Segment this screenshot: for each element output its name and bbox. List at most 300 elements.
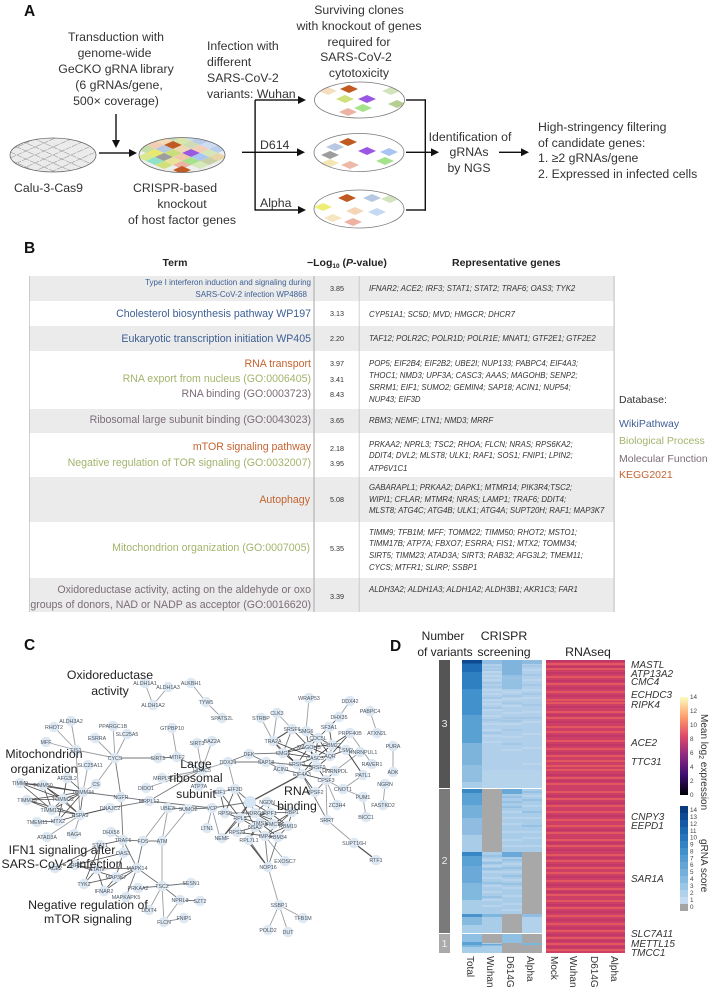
network node labels: NGRN	[377, 782, 393, 788]
axis labels: CRISPR columns: D614G	[504, 956, 515, 988]
colorbar: gRNA score: 0	[690, 904, 694, 911]
icon: surviving dish Wuhan	[314, 82, 406, 118]
gene labels: SAR1A	[631, 874, 664, 885]
network node labels: VCP	[207, 806, 218, 812]
text: transduction: genome-wide	[78, 46, 152, 60]
colorbar: mean log2 expression: 2	[690, 778, 694, 785]
table header: (	[340, 257, 347, 269]
network node labels: PRKAA2	[128, 886, 149, 892]
colorbar: gRNA score: 2	[690, 890, 694, 897]
gene labels: SLC7A11	[631, 929, 673, 940]
network node labels: UBE2I	[160, 806, 176, 812]
label: mitochondrion organization: organization	[10, 762, 78, 776]
network node labels: CS	[92, 782, 100, 788]
row: mitochondrion: CYCS; MTFR1; SLIRP; SSBP1	[369, 563, 477, 572]
row: oxidoreductase: groups of donors, NAD or NADP as acceptor (GO:0016620)	[30, 599, 311, 611]
network node labels	[12, 681, 401, 936]
network node labels: ALDH1A2	[141, 703, 165, 709]
network node labels: RPS6	[218, 811, 232, 817]
text: high-stringency filtering: 1. ≥2 gRNAs/gene	[538, 151, 639, 165]
network node labels: TMS1	[253, 821, 267, 827]
legend: database: Biological Process	[619, 435, 705, 447]
text: infection: Infection with	[207, 39, 279, 53]
arrows: infection branches	[242, 96, 306, 214]
network node labels: LTN1	[201, 826, 213, 832]
text: infection: SARS-CoV-2	[207, 71, 279, 85]
network node labels: DHX58	[102, 830, 120, 836]
row: ribosomal: 3.65	[330, 416, 344, 425]
network node labels: SLC25A11	[77, 763, 103, 769]
text: transduction: GeCKO gRNA library	[58, 62, 175, 76]
row: oxidoreductase: ALDH3A2; ALDH1A3; ALDH1A2; ALDH3B1; AKR1C3; FAR1	[368, 585, 578, 594]
network node labels: EIF3D	[227, 787, 243, 793]
panel A: screening workflow	[0, 3, 697, 228]
row: autophagy: GABARAPL1; PRKAA2; DAPK1; MTMR14; PIK3R4;TSC2;	[369, 483, 572, 492]
row: cholesterol	[116, 308, 516, 320]
colorbar: gRNA score: 10	[690, 834, 698, 842]
label: large ribosomal subunit: Large	[180, 757, 212, 771]
table bands	[29, 276, 614, 612]
colorbar: gRNA score: 11	[690, 828, 697, 835]
network node labels: AFG3L2	[57, 776, 77, 782]
row: mTOR: 3.95	[330, 459, 344, 468]
network node labels: SPATS2L	[211, 716, 233, 722]
row: type I interferon	[145, 278, 576, 299]
text: transduction: Transduction with	[68, 30, 164, 44]
row: ribosomal	[90, 414, 494, 426]
legend: database: Database:	[619, 394, 667, 406]
network node labels: SSBP1	[270, 903, 288, 909]
network node labels: CNOT1	[334, 787, 352, 793]
row: mTOR: mTOR signaling pathway	[193, 441, 312, 453]
network node labels: DDIT4	[141, 908, 157, 914]
row: mitochondrion: TIMM9; TFB1M; MFF; TOMM22; TIMM50; RHOT2; MSTO1;	[369, 528, 577, 537]
network node labels: TFB1M	[294, 916, 312, 922]
label: mitochondrion organization: Mitochondrion	[5, 747, 83, 761]
network node labels: CASC3	[306, 756, 324, 762]
colorbar: mean log2 expression	[680, 694, 709, 810]
label: oxidoreductase activity: Oxidoreductase	[67, 668, 153, 682]
network node labels: SF3A1	[321, 725, 337, 731]
text: variant Alpha: Alpha	[260, 196, 292, 210]
network node labels: TIMM23	[17, 798, 37, 804]
network node labels: TRAF6	[115, 838, 131, 844]
colorbar: gRNA score	[680, 806, 709, 911]
network node labels: NSA2	[248, 825, 262, 831]
network node labels: DDX42	[341, 699, 359, 705]
row: mitochondrion: SIRT5; TIMM23; ATAD3A; SIRT3; RAB32; AFG3L2; TMEM11;	[369, 551, 583, 560]
table column rules	[29, 276, 615, 612]
network node labels: RAVER1	[362, 762, 382, 768]
text: identification: Identification of	[429, 130, 512, 144]
arrows: bracket to NGS	[406, 99, 439, 211]
gene labels: EEPD1	[631, 821, 664, 832]
network node labels: SLC25A5	[116, 732, 138, 738]
colorbar: gRNA score: gRNA score	[698, 839, 709, 893]
column header: number of variants	[417, 629, 473, 659]
colorbar: mean log2 expression: Mean log	[698, 714, 709, 755]
colorbar: gRNA score: 12	[690, 821, 698, 828]
panel letter C: C	[24, 637, 35, 654]
text: identification: by NGS	[447, 161, 491, 175]
row: mTOR: Negative regulation of TOR signaling (GO:0032007)	[68, 457, 311, 469]
network node labels: SESN1	[182, 881, 200, 887]
gene labels: METTL15	[631, 939, 675, 950]
label: RNA binding: RNA	[284, 784, 311, 798]
network node labels: RHOT2	[45, 725, 63, 731]
axis labels: RNAseq columns: Wuhan	[567, 956, 578, 988]
text: high-stringency filtering: 2. Expressed in infected cells	[538, 167, 697, 181]
table header: Term	[163, 257, 187, 269]
colorbar: mean log2 expression: 2	[697, 755, 704, 759]
text: transduction: (6 gRNAs/gene,	[75, 78, 163, 92]
text: identification	[429, 130, 512, 175]
colorbar: gRNA score: 9	[690, 842, 694, 848]
network node labels: ATM	[157, 839, 167, 845]
network node labels: HDAC5	[193, 768, 211, 774]
gene labels	[630, 660, 675, 959]
network node labels: STAT1	[92, 843, 108, 849]
network node labels: HSPA9	[72, 813, 89, 819]
network node labels: SUMO2	[179, 807, 197, 813]
row: autophagy	[259, 483, 605, 515]
row: RNA: 3.41	[330, 375, 344, 384]
row: RNA	[123, 358, 578, 404]
colorbar: gRNA score: 5	[690, 869, 694, 876]
network node labels: BICC1	[358, 815, 374, 821]
table header: 10	[332, 263, 340, 270]
network node labels: RPSF2	[306, 790, 324, 796]
network node labels: RBP1	[285, 810, 299, 816]
network node labels: DIDO1	[138, 786, 154, 792]
network node labels: CDC5L	[309, 736, 327, 742]
network node labels: ALDH3A2	[59, 719, 83, 725]
colorbar: mean log2 expression: 12	[690, 708, 698, 715]
network node labels: SRSF6	[283, 727, 301, 733]
row: mTOR: PRKAA2; NPRL3; TSC2; RHOA; FLCN; NRAS; RPS6KA2;	[369, 440, 573, 449]
column header: CRISPR screening	[477, 629, 531, 659]
network node labels: MRPL4	[153, 776, 171, 782]
gene labels: ATP13A2	[630, 669, 673, 680]
heatmap: CRISPR total column	[462, 660, 482, 953]
text: identification: gRNAs	[450, 145, 488, 159]
row: cholesterol: Cholesterol biosynthesis pathway WP197	[116, 308, 311, 320]
text: CRISPR knockout	[128, 181, 236, 227]
text: high-stringency filtering: High-stringency filtering	[538, 120, 667, 134]
axis labels: RNAseq columns	[548, 956, 619, 988]
network node labels: RPL5	[233, 816, 247, 822]
legend: database: KEGG2021	[619, 469, 673, 481]
colorbar: gRNA score: 1	[690, 897, 694, 904]
column header: number of variants: of variants	[417, 645, 473, 659]
network node labels: RBM34	[269, 835, 287, 841]
row: mitochondrion: TIMM17B; ATP7A; FBXO7; ESRRA; FIS1; MTX2; TOMM34;	[369, 539, 577, 548]
icon: Calu-3-Cas9 dish	[10, 138, 96, 172]
row: oxidoreductase: 3.39	[330, 592, 344, 601]
text: infection	[207, 39, 296, 101]
gene labels: CNPY3	[631, 812, 665, 823]
text: transduction: 500× coverage)	[73, 94, 159, 108]
label: IFN1 signaling: SARS-CoV-2 infection	[2, 857, 123, 871]
label: mitochondrion organization	[5, 747, 83, 776]
network node labels: MAPK14	[127, 866, 148, 872]
network node labels: MAPKAPK5	[112, 895, 140, 901]
axis labels: CRISPR columns: Total	[464, 956, 475, 977]
row: autophagy: Autophagy	[259, 494, 311, 506]
network node labels: AQR	[324, 754, 336, 760]
network node labels: ESRRA	[88, 736, 107, 742]
axis labels: CRISPR columns	[464, 956, 535, 988]
label: large ribosomal subunit	[169, 757, 223, 801]
row: autophagy: MLST8; ATG4C; ATG4B; ULK1; ATG4A; SUPT20H; RAF1; MAP3K7	[369, 506, 605, 515]
panel letter B: B	[24, 240, 35, 257]
row: ribosomal: RBM3; NEMF; LTN1; NMD3; MRRF	[369, 416, 494, 425]
row: RNA: RNA export from nucleus (GO:0006405)	[123, 373, 311, 385]
network node labels: ALDH1A3	[156, 685, 180, 691]
row: mTOR	[68, 440, 573, 473]
network node labels: TMEM11	[26, 820, 48, 826]
row: type I interferon: Type I interferon induction and signaling during	[145, 278, 311, 287]
network node labels: CYCS	[108, 756, 123, 762]
network node labels: SMG6	[298, 729, 314, 735]
label: RNA binding: binding	[277, 799, 317, 813]
row: RNA: SRRM1; EIF1; SUMO2; GEMIN4; SAP18; ACIN1; NUP54;	[369, 383, 571, 392]
row: eukaryotic transcription: Eukaryotic transcription initiation WP405	[121, 333, 311, 345]
network node labels: DUT	[283, 930, 294, 936]
label: negative regulation of mTOR: mTOR signaling	[44, 912, 132, 926]
panel C: interaction network	[2, 637, 401, 936]
network node labels: IRF3	[69, 863, 81, 869]
bar: number of variants: 3	[442, 718, 448, 730]
colorbar: mean log2 expression: 8	[690, 736, 694, 743]
network node labels: RTF1	[369, 858, 383, 864]
network node labels: RPF1	[263, 811, 277, 817]
label: oxidoreductase activity: activity	[91, 684, 130, 698]
table header: P-value)	[346, 257, 387, 269]
network node labels: ACE2	[48, 866, 62, 872]
legend: database: Molecular Function	[619, 453, 708, 465]
label: negative regulation of mTOR: Negative regulation of	[28, 898, 148, 912]
row: eukaryotic transcription	[121, 333, 596, 345]
network node labels: FNIP1	[176, 916, 192, 922]
network node labels: MAP3K7	[106, 875, 127, 881]
label: negative regulation of mTOR	[28, 898, 148, 926]
network node labels: BAG4	[67, 832, 81, 838]
network node labels: PATL1	[355, 773, 371, 779]
network node labels: MTX2	[51, 819, 65, 825]
row: eukaryotic transcription: 2.20	[330, 334, 344, 343]
text: Calu-3-Cas9: Calu-3-Cas9	[14, 181, 83, 195]
table header: −Log	[307, 257, 332, 269]
network node labels: RBM22	[323, 743, 341, 749]
network node labels: SMG5	[275, 751, 291, 757]
bar: number of variants	[439, 660, 450, 953]
table header: Representative genes	[452, 257, 561, 269]
table header	[163, 257, 561, 270]
network node labels: FOS	[138, 839, 149, 845]
network node labels: MRPL12	[139, 799, 159, 805]
network node labels: TOMM22	[52, 797, 74, 803]
row: mTOR: DDIT4; DVL2; MLST8; ULK1; RAF1; SOS1; FNIP1; LPIN2;	[369, 451, 573, 460]
network node labels: ATAD3A	[37, 835, 57, 841]
network node labels: SRSF1	[288, 762, 306, 768]
gene labels: ECHDC3	[631, 690, 673, 701]
legend: database: WikiPathway	[619, 418, 680, 430]
bar: number of variants: 1	[442, 938, 448, 950]
network node labels: TRA2A	[264, 739, 282, 745]
colorbar: mean log2 expression: 4	[690, 764, 694, 771]
legend: database	[619, 394, 708, 481]
column header: CRISPR screening: CRISPR	[481, 629, 527, 643]
heatmap: RNAseq	[546, 660, 625, 953]
network node labels: ACIN1	[273, 767, 289, 773]
network node labels: NGDN	[259, 800, 275, 806]
row: type I interferon: SARS-CoV-2 infection WP4868	[195, 290, 308, 299]
network node labels: EIF4A3	[293, 772, 311, 778]
arrow: transduction down	[112, 114, 120, 148]
text: high-stringency filtering: of candidate genes:	[538, 136, 645, 150]
network node labels: MTIF2	[169, 755, 185, 761]
network node labels: ZC3H4	[329, 803, 345, 809]
colorbar: mean log2 expression: 10	[690, 722, 698, 729]
network node labels: TIMM50	[33, 783, 53, 789]
colorbar: mean log2 expression: 0	[690, 792, 694, 799]
text: CRISPR knockout: knockout	[157, 197, 207, 211]
icon: surviving dish Alpha	[314, 190, 404, 228]
network node labels: DHX35	[330, 715, 348, 721]
network node labels: ATP7A	[191, 784, 208, 790]
column header: CRISPR screening: screening	[477, 645, 531, 659]
label: large ribosomal subunit: ribosomal	[169, 771, 223, 785]
row: RNA: 3.97	[330, 359, 344, 368]
axis labels: RNAseq columns: D614G	[588, 956, 599, 988]
panel B: enrichment table	[24, 240, 708, 612]
network node labels: TIMM9	[12, 781, 28, 787]
network node labels: FMC1	[266, 822, 280, 828]
network node labels: MFF	[41, 740, 52, 746]
text: surviving clones: cytotoxicity	[329, 66, 390, 80]
network node labels: PRPF40B	[338, 731, 362, 737]
column header: RNAseq: RNAseq	[565, 645, 611, 659]
network node labels: SUPT16H	[342, 841, 366, 847]
row: autophagy: WIPI1; CFLAR; MTMR4; NRAS; LAMP1; TRAF6; DDIT4;	[369, 495, 566, 504]
colorbar: gRNA score: 4	[690, 876, 694, 883]
network node labels: ATXN2L	[367, 731, 387, 737]
panel D: heatmap	[390, 629, 709, 988]
colorbar: gRNA score: 13	[690, 814, 698, 821]
bar: number of variants: 2	[442, 855, 448, 867]
column header: number of variants: Number	[422, 629, 464, 643]
network node labels: BAZ2A	[204, 739, 221, 745]
arrow: to filtering	[499, 148, 529, 156]
network node labels: STRBP	[252, 716, 270, 722]
network node labels: SZT2	[194, 899, 207, 905]
gene labels: ACE2	[630, 738, 658, 749]
network node labels: ADK	[388, 770, 399, 776]
network node labels: LSM2	[339, 748, 353, 754]
network node labels: SIRT5	[151, 756, 166, 762]
network node labels: WRAP53	[298, 696, 320, 702]
network node labels: EIF1	[214, 790, 226, 796]
network node labels: ALKBH1	[181, 681, 201, 687]
text: surviving clones	[295, 3, 422, 80]
text: surviving clones: required for	[328, 35, 390, 49]
row: mitochondrion: 5.35	[330, 544, 344, 553]
network node labels: IFNAR2	[95, 889, 113, 895]
gene labels: TTC31	[631, 757, 662, 768]
heatmap: CRISPR variant columns	[482, 660, 542, 953]
network nodes	[20, 683, 393, 932]
row: cholesterol: 3.13	[330, 309, 344, 318]
network node labels: PABPC4	[360, 709, 380, 715]
text: infection: variants: Wuhan	[207, 87, 296, 101]
network node labels: RPL7L1	[239, 838, 259, 844]
hub node	[244, 796, 256, 808]
text: CRISPR knockout: of host factor genes	[128, 213, 236, 227]
axis labels: CRISPR columns: Alpha	[524, 956, 535, 982]
network node labels: PURA	[386, 744, 401, 750]
network node labels: DNAJC2	[100, 806, 120, 812]
network node labels: FIS1	[70, 748, 82, 754]
colorbar: gRNA score: 14	[690, 807, 698, 814]
network node labels: NDRG1	[246, 811, 264, 817]
text: variant D614: D614	[260, 138, 290, 152]
row: mTOR: ATP6V1C1	[368, 464, 407, 473]
network node labels: SAP18	[258, 760, 274, 766]
network node labels: MAGOHB	[297, 745, 321, 751]
panel letter D: D	[390, 638, 401, 655]
colorbar: gRNA score: 6	[690, 862, 694, 869]
row: RNA: RNA transport	[244, 358, 311, 370]
row: cholesterol: CYP51A1; SC5D; MVD; HMGCR; DHCR7	[369, 310, 516, 319]
row: mitochondrion	[112, 528, 583, 572]
network node labels: IMP4	[259, 834, 271, 840]
network node labels: CPSF3	[317, 778, 335, 784]
label: IFN1 signaling	[2, 843, 123, 871]
label: IFN1 signaling: IFN1 signaling after	[9, 843, 115, 857]
row: eukaryotic transcription: TAF12; POLR2C; POLR1D; POLR1E; MNAT1; GTF2E1; GTF2E2	[369, 334, 596, 343]
row: RNA: NUP43; EIF3D	[369, 395, 421, 404]
network node labels: FASTKD2	[371, 803, 395, 809]
network node labels: NGFR	[113, 795, 129, 801]
network node labels: NOP16	[259, 865, 277, 871]
colorbar: mean log2 expression: 6	[690, 750, 694, 757]
network node labels: GTPBP10	[160, 726, 184, 732]
network node labels: HNRNPDL	[322, 769, 348, 775]
network node labels: ALDH1A1	[133, 681, 157, 687]
network node labels: POLD2	[259, 928, 277, 934]
network node labels: STAT2	[89, 867, 105, 873]
label: large ribosomal subunit: subunit	[176, 787, 216, 801]
colorbar: mean log2 expression: 14	[690, 694, 698, 701]
network node labels: OAS3	[116, 851, 130, 857]
colorbar: gRNA score: 3	[690, 883, 694, 890]
label: oxidoreductase activity	[67, 668, 153, 698]
row: mTOR: 2.18	[330, 444, 344, 453]
colorbar: gRNA score: 8	[690, 848, 694, 856]
network node labels: TIMM17B	[41, 808, 64, 814]
network node labels: PUM1	[356, 795, 370, 801]
row: RNA: 8.43	[330, 390, 344, 399]
text: surviving clones: Surviving clones	[314, 3, 404, 17]
network edges	[20, 683, 393, 932]
row: ribosomal: Ribosomal large subunit binding (GO:0043023)	[90, 414, 311, 426]
network node labels: SIRT3	[190, 741, 205, 747]
axis labels: CRISPR columns: Wuhan	[484, 956, 495, 988]
arrow: to knockout	[99, 149, 137, 157]
network node labels: RPS23	[229, 830, 245, 836]
gene labels: CMC4	[631, 677, 660, 688]
